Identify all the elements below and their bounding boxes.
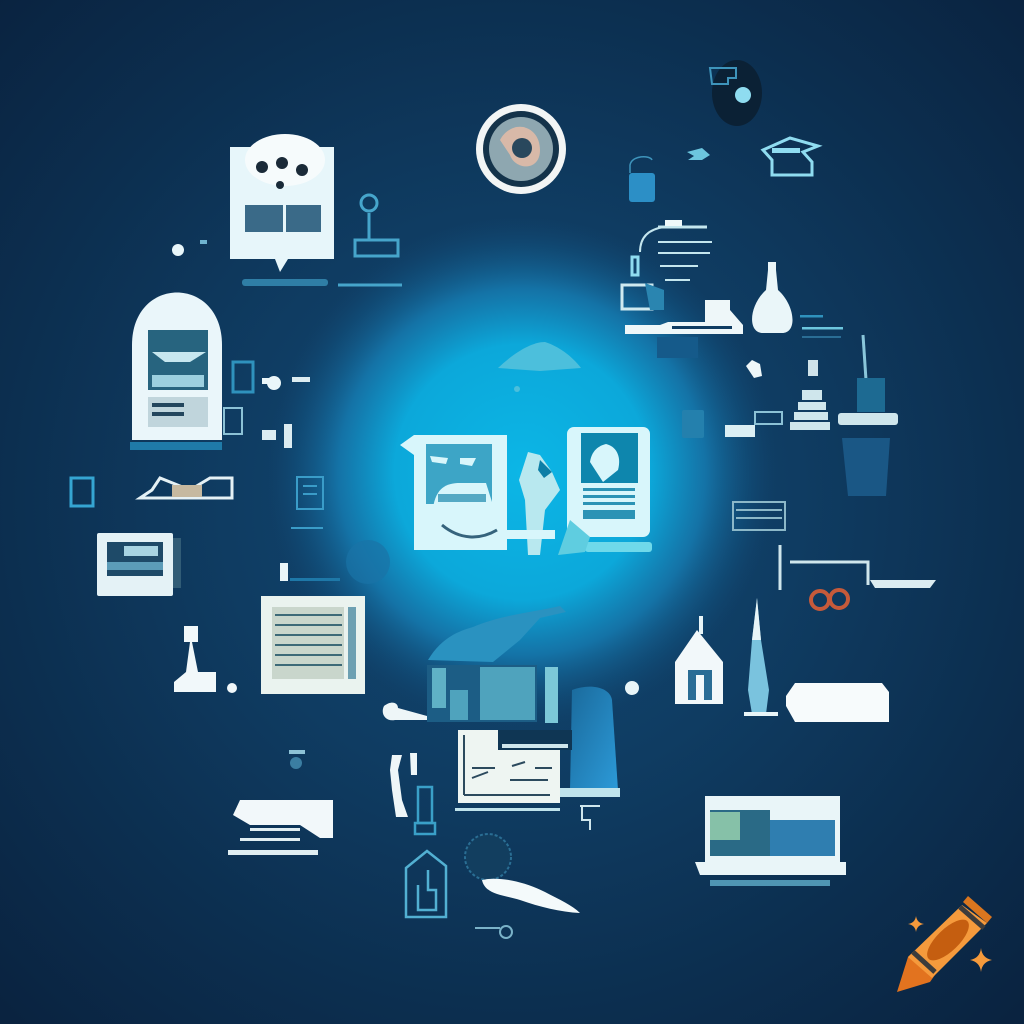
white block: [786, 683, 889, 722]
small dots: [172, 240, 207, 256]
top right devices: [687, 138, 818, 175]
top right dark face icon: [710, 60, 762, 126]
dark blue bin: [842, 438, 890, 496]
icon: umbrella above centre: [498, 342, 581, 392]
device with red circles: [780, 545, 936, 609]
bottom right laptop: [695, 796, 846, 886]
small icon: [289, 750, 305, 769]
small marker left of figure: [280, 563, 340, 581]
big table document: [261, 596, 365, 694]
white figure / chess piece: [174, 626, 237, 693]
printer machine: [622, 283, 743, 358]
monitor left: [97, 533, 181, 596]
centre card: left: [400, 435, 507, 550]
centre card: right: [567, 427, 652, 552]
top-left poster with cloud: [230, 134, 334, 286]
padlock: [629, 157, 655, 202]
white wide block bottom left: [228, 800, 333, 855]
right small icons row: [682, 360, 818, 438]
white marks left of doc: [383, 703, 435, 834]
document with lines top right: [632, 220, 712, 280]
central glow: [267, 217, 777, 727]
bottom centre blue tower: [570, 687, 618, 790]
centre connector figure: [500, 452, 590, 555]
logo: crayon: [897, 896, 992, 992]
icon: microscope beside poster: [338, 195, 402, 285]
top round badge: [476, 104, 566, 194]
document icon: [291, 477, 323, 528]
bottle flask: [752, 262, 793, 333]
small dot: [625, 681, 639, 695]
tall-device left: [130, 292, 222, 450]
machine left row: [71, 478, 232, 506]
white swoosh: [482, 879, 580, 913]
right vacuum machine: [838, 335, 898, 425]
bottom centre scene: whale shape and blocks: [427, 606, 566, 723]
small glyph cluster beside tall device: [224, 362, 310, 448]
small bars right: [800, 315, 843, 338]
server box: [733, 502, 785, 530]
shield tower bottom: [406, 851, 446, 917]
vacuum wand: [744, 598, 778, 716]
bottom centre doc: [455, 730, 620, 830]
dark round head: [465, 834, 511, 880]
shadow figure head: [346, 540, 390, 584]
stacked tower icon: [790, 390, 830, 430]
tower lantern: [675, 616, 723, 704]
small squiggle: [475, 926, 512, 938]
